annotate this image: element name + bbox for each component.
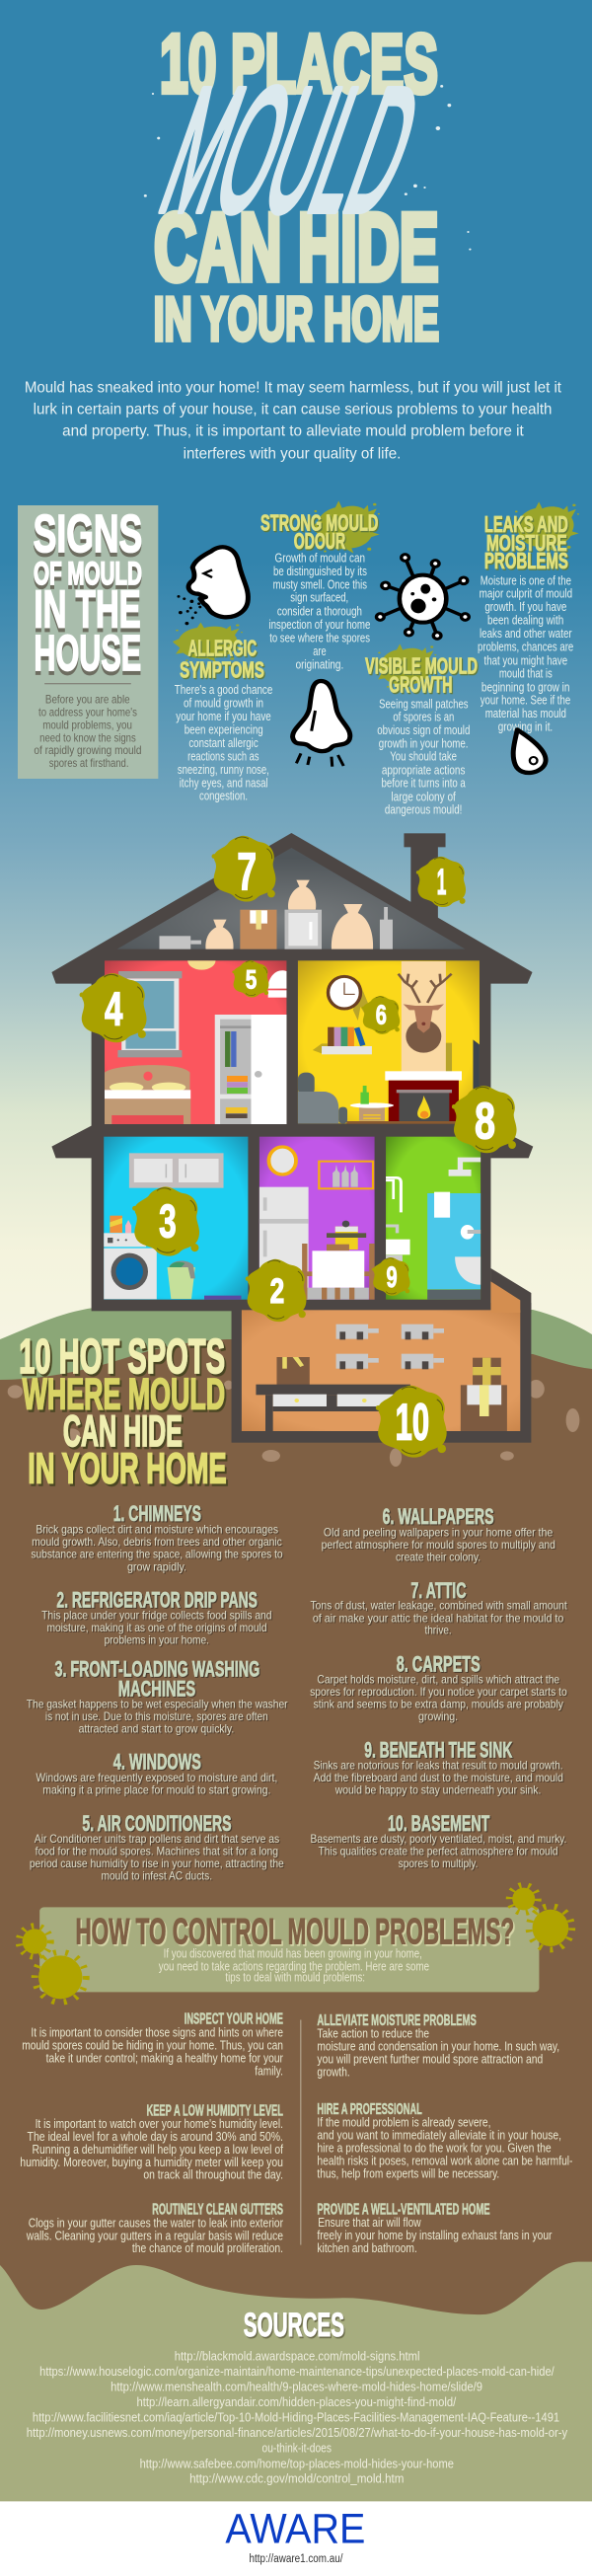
hot spot 2: refrigerator drip pans: [41, 1589, 272, 1646]
hot spot 5: air conditioners: 5. AIR CONDITIONERS: [82, 1812, 232, 1837]
sign column: allergic symptoms: [173, 623, 272, 802]
description: reactions such as: [187, 749, 259, 763]
description: [268, 551, 370, 671]
sources band: [0, 2262, 592, 2501]
hot spot 3: front-loading washing machines: [27, 1658, 288, 1735]
tip: inspect your home: It is important to consider those signs and hints on where: [31, 2025, 283, 2039]
tip: inspect your home: family.: [255, 2064, 283, 2078]
tip: hire a professional: If the mould problem is already severe,: [317, 2116, 490, 2129]
workbench: [256, 1357, 410, 1431]
tip: keep a low humidity level: KEEP A LOW HUMIDITY LEVEL: [146, 2100, 283, 2119]
footer logo: [225, 2505, 365, 2565]
stacked boxes: [461, 1358, 507, 1431]
heading: GROWTH: [389, 673, 452, 698]
tip: keep a low humidity level: humidity. Moreover, buying a humidity meter will keep you: [20, 2156, 283, 2169]
hot spot 3: front-loading washing machines: The gasket happens to be wet especially when the washer: [27, 1698, 288, 1710]
heading: ODOUR: [294, 529, 345, 555]
splat behind heading: [312, 500, 380, 554]
intro paragraph: and property. Thus, it is important to alleviate mould problem before it: [62, 422, 524, 439]
hot spot 2: refrigerator drip pans: problems in your home.: [105, 1632, 209, 1646]
living room: [298, 960, 480, 1124]
sources list: http://www.safebee.com/home/top-places-mold-hides-your-home: [140, 2457, 454, 2471]
icon: mould spore: [377, 555, 469, 639]
tip: inspect your home: [22, 2009, 283, 2078]
description: originating.: [296, 658, 343, 671]
heading: SYMPTOMS: [180, 658, 264, 683]
hot spot 4: windows: Windows are frequently exposed to moisture and dirt,: [36, 1771, 277, 1784]
tip: routinely clean gutters: [26, 2200, 283, 2255]
description: sneezing, runny nose,: [178, 763, 269, 777]
heading: 10 hot spots: CAN HIDE: [63, 1406, 183, 1456]
basement: [232, 1303, 531, 1443]
bedroom: [105, 960, 286, 1124]
panel heading: OF MOULD: [34, 557, 142, 591]
hot spot 2: refrigerator drip pans: 2. REFRIGERATOR DRIP PANS: [56, 1589, 258, 1613]
hot spot 2: refrigerator drip pans: This place under your fridge collects food spills and: [41, 1608, 272, 1622]
description: [478, 573, 573, 733]
tips divider: [300, 2019, 302, 2244]
blob 9: 9: [386, 1260, 398, 1293]
chimney: [404, 833, 446, 925]
description: large colony of: [391, 790, 456, 803]
title block: [142, 17, 472, 353]
heading: ALLERGIC: [188, 637, 257, 661]
hot spot 6: wallpapers: [322, 1505, 555, 1563]
description: of mould growth in: [184, 696, 263, 710]
panel intro: If you discovered that mould has been growing in your home,: [164, 1947, 422, 1960]
description: Growth of mould can: [275, 551, 365, 565]
AWARE wordmark: AWARE: [225, 2505, 365, 2552]
sign column: visible mould growth: [365, 644, 478, 816]
blob 2: [246, 1259, 306, 1322]
description: are: [313, 644, 327, 658]
sources list: http://www.cdc.gov/mold/control_mold.htm: [189, 2472, 404, 2486]
heading: [365, 654, 478, 698]
panel: signs of mould in the house: [18, 505, 158, 779]
tip: keep a low humidity level: The ideal level for a whole day is around 30% and 50%.: [28, 2130, 283, 2144]
sky gradient background: [0, 0, 592, 1402]
panel text: spores at firsthand.: [49, 756, 128, 770]
blob 5: [232, 960, 268, 997]
panel intro: you need to take actions regarding the problem. Here are some: [159, 1959, 429, 1973]
description: You should take: [390, 750, 457, 763]
hot spot 4: windows: 4. WINDOWS: [113, 1751, 201, 1775]
hot spot 6: wallpapers: create their colony.: [396, 1551, 481, 1563]
blob 6: 6: [376, 1001, 387, 1030]
hot spot 10: basement: spores to multiply.: [399, 1856, 478, 1870]
hot spot 7: attic: 7. ATTIC: [410, 1579, 467, 1604]
panel heading: [34, 505, 142, 681]
description: [175, 683, 272, 802]
icon: water drop: [513, 729, 546, 773]
sources list: ou-think-it-does: [262, 2442, 332, 2456]
hot spot 10: basement: 10. BASEMENT: [388, 1812, 490, 1837]
description: sign surfaced,: [290, 591, 348, 604]
blob 1: [416, 857, 466, 907]
intro paragraph: [25, 379, 561, 462]
hot spot 4: windows: making it a prime place for mould to start growing.: [42, 1783, 270, 1796]
blob 4: 4: [105, 983, 122, 1036]
panel heading: HOUSE: [34, 625, 141, 681]
heading: 10 hot spots: 10 HOT SPOTS: [19, 1329, 225, 1384]
hot spot 5: air conditioners: period cause humidity to rise in your home, attracting the: [30, 1856, 284, 1870]
blob 8: [452, 1086, 517, 1153]
hot spot 7: attic: thrive.: [424, 1624, 452, 1636]
splat behind heading: [512, 501, 579, 551]
green hill: [0, 1308, 592, 1402]
heading: 10 hot spots: WHERE MOULD: [23, 1370, 225, 1419]
panel intro: [159, 1947, 429, 1984]
blob 3: [132, 1186, 199, 1256]
description: mould that is: [499, 667, 553, 680]
hot spot 8: carpets: 8. CARPETS: [397, 1653, 481, 1677]
panel text: mould problems, you: [42, 718, 132, 731]
tip: hire a professional: thus, help from experts will be necessary.: [317, 2166, 499, 2180]
description: growing in it.: [498, 720, 553, 733]
tip: alleviate moisture problems: [317, 2010, 559, 2079]
tip: inspect your home: INSPECT YOUR HOME: [185, 2009, 283, 2027]
blob 7: [212, 836, 275, 902]
brown earth: [0, 1339, 592, 2329]
hot spot 1: chimneys: [31, 1502, 283, 1573]
heading: 10 hot spots: [19, 1329, 227, 1492]
hot spot 7: attic: [311, 1579, 567, 1636]
panel text: of rapidly growing mould: [34, 743, 141, 757]
hot spot 5: air conditioners: mould to infest AC ducts.: [102, 1868, 212, 1882]
tip: routinely clean gutters: Clogs in your gutter causes the water to leak into exterior: [29, 2216, 283, 2230]
heading: [180, 637, 264, 683]
tip: hire a professional: HIRE A PROFESSIONAL: [317, 2099, 422, 2118]
tip: alleviate moisture problems: Take action to reduce the: [317, 2026, 429, 2040]
blob 1: 1: [437, 862, 446, 902]
description: itchy eyes, and nasal: [180, 776, 268, 790]
sources list: http://learn.allergyandair.com/hidden-places-you-might-find-mold/: [137, 2395, 456, 2410]
description: appropriate actions: [382, 763, 466, 777]
description: inspection of your home: [268, 618, 370, 632]
tip: keep a low humidity level: [20, 2100, 283, 2181]
basement interior: [242, 1310, 520, 1431]
blob 10: 10: [396, 1394, 429, 1450]
heading: 10 hot spots: IN YOUR HOME: [28, 1444, 227, 1492]
sources list: http://blackmold.awardspace.com/mold-signs.html: [175, 2350, 420, 2364]
panel text: need to know the signs: [39, 730, 136, 744]
hot spot 5: air conditioners: food for the mould spores. Machines that sit for a long: [36, 1845, 278, 1857]
tip: keep a low humidity level: It is important to watch over your home's humidity level.: [36, 2117, 283, 2131]
wavy green background: [0, 2262, 592, 2501]
tip: alleviate moisture problems: growth.: [317, 2065, 350, 2079]
description: to see where the spores: [269, 631, 370, 644]
tip: hire a professional: [317, 2099, 572, 2180]
hot spot 1: chimneys: mould growth. Also, debris from trees and other organic: [32, 1535, 282, 1549]
description: before it turns into a: [381, 777, 466, 790]
sources list: [27, 2350, 568, 2486]
description: your home if you have: [176, 710, 271, 723]
description: dangerous mould!: [385, 803, 462, 816]
hot spot 3: front-loading washing machines: 3. FRONT-LOADING WASHING: [54, 1658, 259, 1682]
hot spot 5: air conditioners: [30, 1812, 284, 1882]
heading: STRONG MOULD: [260, 511, 378, 536]
blob 2: 2: [270, 1272, 284, 1311]
laundry room: [104, 1137, 248, 1300]
hot spot 3: front-loading washing machines: MACHINES: [118, 1678, 195, 1702]
brush splatter dots: [144, 85, 472, 251]
icon: nose: [293, 681, 350, 767]
spore decorations: [19, 1885, 572, 2003]
basement slope interior: [490, 1281, 520, 1313]
blob 6: [362, 996, 400, 1034]
panel text: [34, 683, 141, 770]
numbered mould blobs: [80, 836, 517, 1322]
panel text: to address your home's: [38, 705, 137, 719]
splat behind heading: [376, 644, 436, 689]
hot spot 8: carpets: growing.: [418, 1709, 458, 1723]
hot spot 5: air conditioners: Air Conditioner units trap pollens and dirt that serve as: [35, 1832, 279, 1846]
hot spot 6: wallpapers: 6. WALLPAPERS: [383, 1505, 494, 1530]
bathroom: [386, 1137, 481, 1300]
hot spot 1: chimneys: grow rapidly.: [127, 1559, 186, 1573]
panel background: [39, 1907, 539, 1992]
hot spot 3: front-loading washing machines: attracted and start to grow quickly.: [79, 1721, 234, 1735]
tip: routinely clean gutters: the chance of mould proliferation.: [132, 2241, 283, 2255]
description: constant allergic: [188, 736, 259, 750]
tip: inspect your home: take it under control; making a healthy home for your: [46, 2051, 283, 2065]
description: be distinguished by its: [273, 565, 367, 578]
blob 10: [376, 1386, 447, 1458]
description: congestion.: [199, 790, 248, 802]
description: growth in your home.: [379, 737, 468, 750]
hot spot 10: basement: [311, 1812, 566, 1870]
heading: VISIBLE MOULD: [365, 654, 478, 679]
tip: provide a well-ventilated home: kitchen and bathroom.: [317, 2241, 417, 2255]
panel background: [18, 505, 158, 779]
tip: provide a well-ventilated home: Ensure that air will flow: [318, 2216, 421, 2230]
hot spot 4: windows: [36, 1751, 277, 1796]
blob 5: 5: [246, 965, 257, 995]
description: Seeing small patches: [379, 697, 469, 711]
hot spot 2: refrigerator drip pans: moisture, making it as one of the origins of mould: [46, 1621, 267, 1634]
icon: sneezing face: [177, 547, 248, 625]
panel heading: SIGNS: [34, 505, 142, 564]
heading: [484, 512, 568, 574]
hot spot 8: carpets: [310, 1653, 567, 1723]
blob 4: [80, 973, 147, 1042]
kitchen: [259, 1137, 375, 1300]
blob 7: 7: [237, 843, 257, 902]
hot spot 9: beneath the sink: [314, 1739, 563, 1796]
hot spot 1: chimneys: substance are entering the space, allowing the spores to: [31, 1548, 283, 1560]
blob 9: [372, 1257, 410, 1296]
house illustration: [51, 833, 533, 1313]
splat behind heading: [173, 623, 243, 662]
hot spot 3: front-loading washing machines: is not in use. Due to this moisture, spores are often: [45, 1709, 268, 1723]
panel heading: IN THE: [34, 580, 141, 640]
stored grey canisters: [336, 1325, 444, 1369]
tip: keep a low humidity level: Running a dehumidifier will help you keep a low level of: [33, 2143, 283, 2157]
hot spot 1: chimneys: 1. CHIMNEYS: [113, 1502, 201, 1527]
panel: how to control mould problems: [19, 1885, 572, 2003]
panel text: Before you are able: [45, 692, 130, 706]
blob 3: 3: [159, 1195, 177, 1248]
description: musty smell. Once this: [273, 577, 367, 591]
hot spot 1: chimneys: Brick gaps collect dirt and moisture which encourages: [36, 1523, 278, 1536]
description: obvious sign of mould: [377, 723, 470, 737]
description: [377, 697, 470, 816]
tip: provide a well-ventilated home: [317, 2200, 553, 2255]
description: of spores is an: [393, 711, 454, 723]
sign column: leaks and moisture problems: [478, 501, 579, 733]
intro paragraph: interferes with your quality of life.: [184, 444, 401, 462]
description: There's a good chance: [175, 683, 272, 697]
blob 8: 8: [475, 1093, 495, 1149]
house walls and roof: [51, 833, 533, 1313]
attic room: [117, 848, 465, 949]
sources heading: SOURCES: [244, 2306, 344, 2343]
tip: routinely clean gutters: walls. Cleaning your gutters in a regular basis will reduce: [26, 2229, 283, 2242]
footer url: http://aware1.com.au/: [250, 2551, 343, 2565]
tip: keep a low humidity level: on track all throughout the day.: [143, 2168, 283, 2181]
tip: inspect your home: mould spores could be hiding in your home. Thus, you can: [22, 2038, 283, 2052]
basement shell: [232, 1303, 531, 1443]
description: been experiencing: [185, 722, 263, 736]
panel intro: tips to deal with mould problems:: [225, 1971, 365, 1984]
sign column: strong mould odour: [260, 500, 380, 671]
pebbles in the soil: [8, 1380, 579, 1467]
heading: [260, 511, 378, 555]
tip: routinely clean gutters: ROUTINELY CLEAN GUTTERS: [152, 2200, 283, 2218]
description: consider a thorough: [277, 604, 362, 618]
